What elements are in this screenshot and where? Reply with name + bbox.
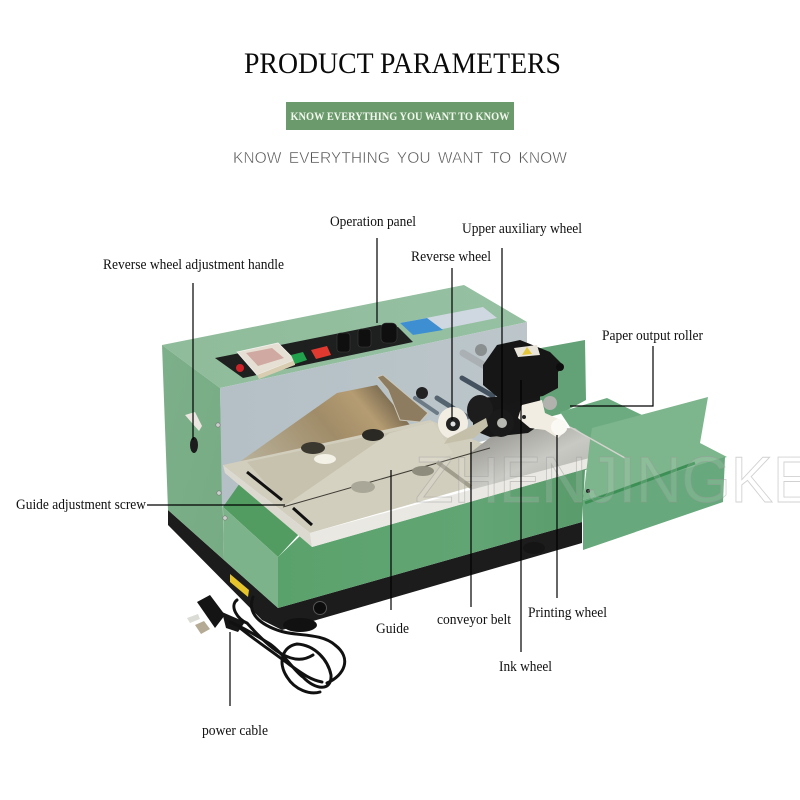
- label: ink wheel: Ink wheel: [499, 659, 552, 675]
- output tray: [570, 397, 727, 550]
- buttons: [291, 352, 307, 364]
- label: paper output roller: Paper output roller: [602, 328, 703, 344]
- title: PRODUCT PARAMETERS: [244, 47, 561, 80]
- label: conveyor belt: conveyor belt: [437, 612, 512, 628]
- guide stand: [377, 375, 428, 422]
- label: reverse wheel: Reverse wheel: [411, 249, 491, 265]
- bottom plate: [223, 420, 520, 533]
- steel plate: [470, 428, 608, 492]
- label: guide adjustment screw: Guide adjustment screw: [16, 497, 146, 513]
- info label: [400, 307, 497, 335]
- label: operation panel: Operation panel: [330, 214, 416, 230]
- banner: [286, 102, 514, 130]
- ovals: [301, 429, 434, 493]
- bracket: [444, 418, 488, 444]
- left handle: [185, 412, 202, 453]
- mid roller: [467, 395, 493, 425]
- left side: [162, 345, 224, 560]
- tray: [223, 375, 608, 547]
- green wedge: [223, 483, 300, 557]
- slits: [247, 448, 490, 525]
- clear cover: [237, 343, 295, 375]
- sticker and socket: [230, 574, 326, 614]
- reverse wheel: [438, 407, 468, 439]
- upper auxiliary wheel: [488, 409, 514, 437]
- guide plate: [283, 422, 453, 507]
- banner: KNOW EVERYTHING YOU WANT TO KNOW: [290, 111, 510, 123]
- output back plate: [520, 340, 586, 425]
- label: printing wheel: Printing wheel: [528, 605, 607, 621]
- label: paper output roller: [570, 328, 703, 406]
- label: guide: Guide: [376, 621, 409, 637]
- slider: [437, 462, 471, 487]
- output middle plate: [560, 398, 660, 470]
- machine illustration: [162, 285, 727, 693]
- label: operation panel: [330, 214, 416, 323]
- lower front: [278, 463, 606, 608]
- label: upper auxiliary wheel: Upper auxiliary wheel: [462, 221, 582, 237]
- machine feet: [283, 542, 545, 632]
- printing wheel: [518, 396, 567, 438]
- silver panel: [220, 322, 527, 507]
- power cord and plug: [187, 595, 345, 693]
- back plate: [228, 385, 410, 475]
- label: reverse wheel adjustment handle: Reverse wheel adjustment handle: [103, 257, 284, 273]
- label: power cable: power cable: [202, 723, 268, 739]
- lower left panel: [223, 507, 278, 608]
- base black: [168, 510, 582, 630]
- top face: [162, 285, 527, 388]
- knobs: [337, 323, 397, 352]
- print head: [438, 340, 567, 444]
- front lip: [310, 453, 608, 547]
- label: power cable: [202, 632, 268, 739]
- subtitle: KNOW EVERYTHING YOU WANT TO KNOW: [233, 150, 568, 167]
- control panel: [215, 307, 497, 379]
- screws: [216, 423, 227, 520]
- shafts behind head: [415, 344, 493, 417]
